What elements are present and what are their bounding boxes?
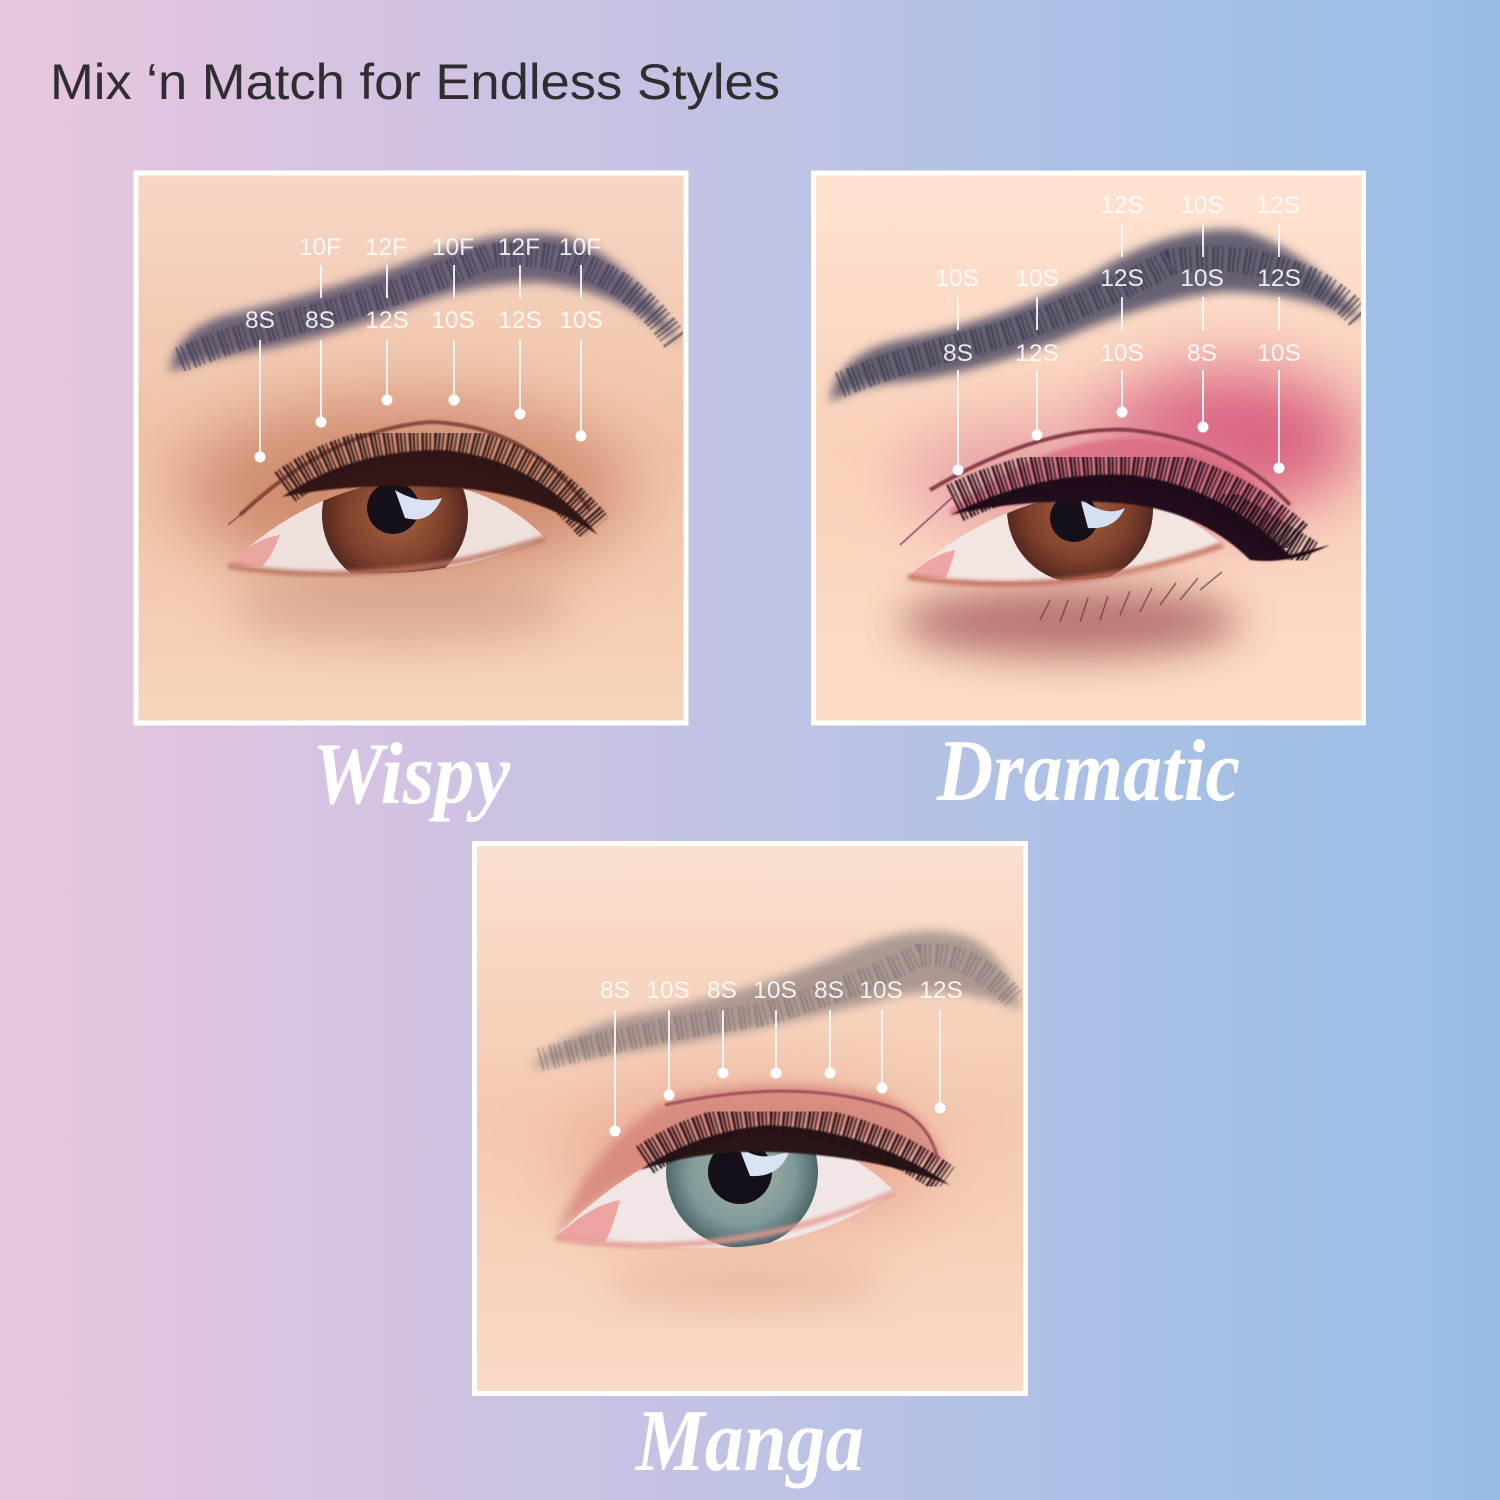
- labels: Dramatic lash map: 8S: [943, 340, 973, 367]
- labels: Wispy lash map: 10F: [559, 234, 601, 261]
- labels: Wispy lash map: 12S: [498, 307, 542, 334]
- labels: Dramatic lash map: 12S: [1015, 340, 1059, 367]
- heading: Dramatic: Dramatic: [936, 723, 1240, 820]
- labels: Dramatic lash map: 10S: [935, 265, 979, 292]
- labels: Dramatic lash map: 12S: [1100, 265, 1144, 292]
- labels: Manga lash map: [600, 977, 963, 1136]
- labels: Dramatic lash map: 12S: [1257, 265, 1301, 292]
- labels: Manga lash map: 10S: [753, 977, 797, 1004]
- labels: Dramatic lash map: 12S: [1256, 192, 1300, 219]
- panel: Wispy: [136, 173, 686, 723]
- heading: Wispy: Wispy: [312, 726, 511, 823]
- labels: Dramatic lash map: 8S: [1187, 340, 1217, 367]
- labels: Wispy lash map: 8S: [245, 307, 275, 334]
- panel: Manga: [474, 844, 1026, 1394]
- heading: Manga: Manga: [634, 1393, 864, 1490]
- labels: Dramatic lash map: 10S: [1180, 265, 1224, 292]
- labels: Wispy lash map: 12S: [365, 307, 409, 334]
- labels: Wispy lash map: 12F: [498, 234, 540, 261]
- labels: Wispy lash map: [245, 234, 603, 462]
- labels: Manga lash map: 8S: [600, 977, 630, 1004]
- labels: Wispy lash map: 10F: [299, 234, 341, 261]
- labels: Dramatic lash map: 12S: [1100, 192, 1144, 219]
- labels: Dramatic lash map: 10S: [1100, 340, 1144, 367]
- labels: Manga lash map: 8S: [707, 977, 737, 1004]
- labels: Manga lash map: 10S: [646, 977, 690, 1004]
- labels: Manga lash map: 10S: [859, 977, 903, 1004]
- labels: Dramatic lash map: 10S: [1257, 340, 1301, 367]
- labels: Dramatic lash map: 10S: [1180, 192, 1224, 219]
- labels: Wispy lash map: 10S: [559, 307, 603, 334]
- labels: Dramatic lash map: 10S: [1015, 265, 1059, 292]
- labels: Wispy lash map: 10S: [431, 307, 475, 334]
- title: Mix ‘n Match for Endless Styles: [50, 54, 780, 110]
- labels: Wispy lash map: 10F: [432, 234, 474, 261]
- labels: Manga lash map: 8S: [814, 977, 844, 1004]
- labels: Wispy lash map: 8S: [305, 307, 335, 334]
- labels: Manga lash map: 12S: [919, 977, 963, 1004]
- panel: Dramatic: [814, 173, 1364, 723]
- labels: Dramatic lash map: [935, 192, 1301, 476]
- labels: Wispy lash map: 12F: [365, 234, 407, 261]
